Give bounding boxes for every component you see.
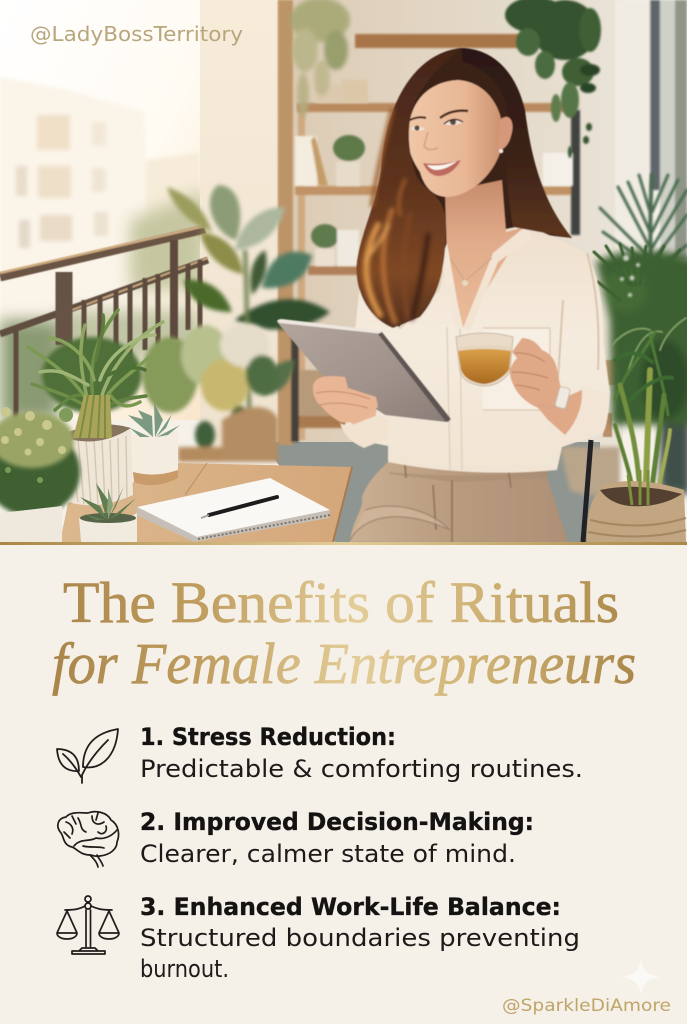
large potted plant behind table xyxy=(142,185,330,462)
hanging plant left xyxy=(290,0,350,117)
watermark: LadyBossTerritory: @LadyBossTerritory xyxy=(30,22,243,46)
title line 2: for Female Entrepreneurs xyxy=(52,631,636,696)
title line 1: The Benefits of Rituals xyxy=(63,570,619,635)
cream wall xyxy=(200,0,278,450)
small succulent in two-tone pot xyxy=(128,403,180,485)
icon: balance scales xyxy=(57,896,119,954)
ribbed pot with fern xyxy=(28,310,163,505)
description line 1: Structured boundaries preventing xyxy=(140,924,580,952)
right hand and watch xyxy=(510,338,582,435)
necklace pendant xyxy=(450,258,492,286)
heading: 1. Stress Reduction: xyxy=(140,723,396,751)
icon: brain xyxy=(58,812,119,867)
description: Predictable & comforting routines. xyxy=(140,755,583,783)
left sleeve cuff xyxy=(340,416,376,448)
icon: leaf sprout xyxy=(57,729,118,783)
shelf objects: books and pots xyxy=(295,80,573,266)
blouse collar xyxy=(464,228,524,330)
tea glass xyxy=(456,333,524,386)
chair and blurred basket behind xyxy=(560,360,620,542)
wooden table xyxy=(60,463,352,542)
green mound plant xyxy=(0,407,80,542)
description: Clearer, calmer state of mind. xyxy=(140,840,516,868)
back wall behind shelves xyxy=(278,0,623,450)
front hair with sunlit strands xyxy=(357,50,460,328)
eyes and brows xyxy=(410,111,468,131)
right hair mass xyxy=(462,48,572,238)
blouse xyxy=(345,225,610,473)
benefit 3 xyxy=(57,893,580,983)
window and distant building xyxy=(0,0,205,420)
notebook with pen xyxy=(137,478,330,542)
photo: woman on a sunny balcony xyxy=(0,0,687,542)
right window column xyxy=(615,0,687,260)
gold divider xyxy=(0,542,687,545)
left forearm xyxy=(350,408,377,425)
wooden shelving xyxy=(278,0,580,445)
heading: 3. Enhanced Work-Life Balance: xyxy=(140,893,561,921)
floor xyxy=(262,442,600,542)
trousers xyxy=(350,460,568,542)
watermark: SparkleDiAmore: @SparkleDiAmore xyxy=(502,996,671,1016)
tropical plant on the right xyxy=(587,175,687,542)
left hand holding tablet xyxy=(313,376,378,423)
title xyxy=(52,570,636,696)
ear xyxy=(498,117,513,150)
hanging plant right xyxy=(505,0,601,158)
neck and chest xyxy=(445,180,525,328)
hair behind shoulders xyxy=(357,48,572,330)
description line 2: burnout. xyxy=(140,955,229,983)
icon: sparkle xyxy=(622,960,660,995)
benefit 2 xyxy=(58,808,534,868)
small pot with succulent on table xyxy=(79,483,137,542)
face xyxy=(408,80,503,197)
balcony railing xyxy=(0,226,208,420)
benefit 1 xyxy=(57,723,583,783)
heading: 2. Improved Decision-Making: xyxy=(140,808,534,836)
smile xyxy=(423,160,461,176)
woman xyxy=(277,48,610,542)
nose xyxy=(424,132,438,150)
tablet xyxy=(277,319,451,422)
